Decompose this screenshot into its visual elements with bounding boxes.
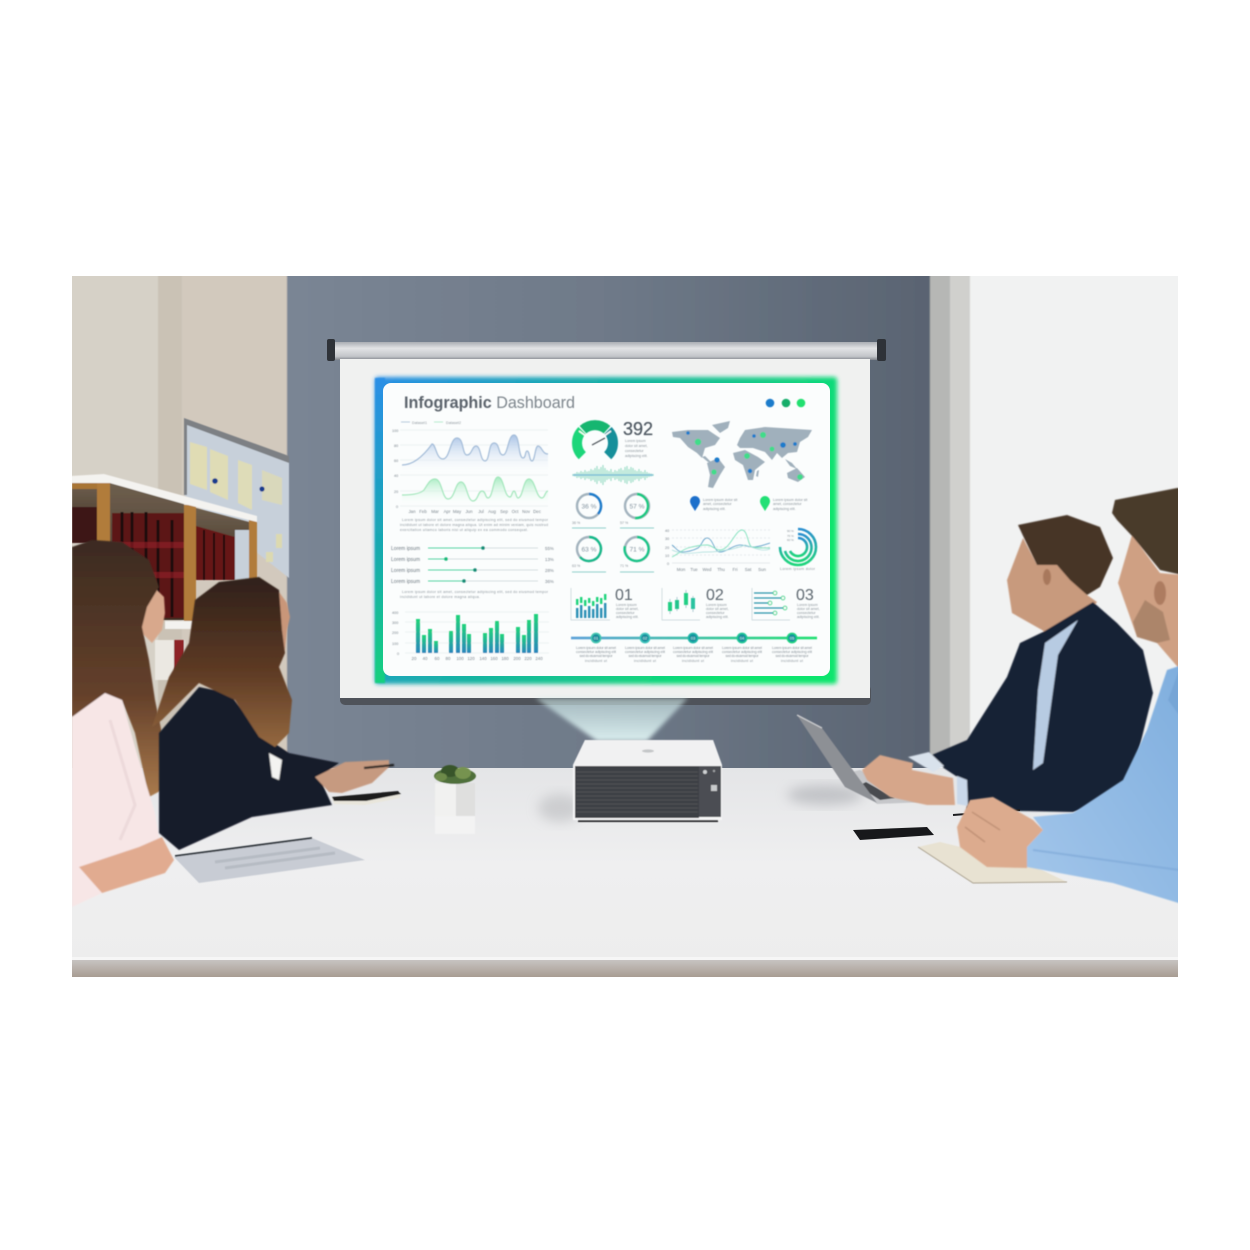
map legend blue: amet, consectetur <box>703 502 732 506</box>
timeline: incididunt ut <box>634 659 656 663</box>
papers on table <box>174 838 365 883</box>
title: Infographic Dashboard <box>404 393 575 412</box>
man with blue shirt <box>957 488 1182 904</box>
woman with pale blouse <box>72 540 174 907</box>
timeline: Lorem ipsum dolor sit amet <box>722 646 762 650</box>
sliders: Lorem ipsum <box>391 546 420 552</box>
bar chart: 0 <box>397 652 399 656</box>
map legend green: amet, consectetur <box>773 502 802 506</box>
sliders: 13% <box>545 557 554 562</box>
card 03: consectetur <box>797 611 816 615</box>
gauge value: Lorem ipsum <box>625 439 646 443</box>
laptop <box>797 715 925 804</box>
card 03: dolor sit amet, <box>797 607 820 611</box>
bar chart: 240 <box>535 656 543 661</box>
chart description: Lorem ipsum dolor sit amet, consectetur adipiscing elit, sed do eiusmod tempor <box>402 518 549 522</box>
card 02: adipiscing elit. <box>706 615 729 619</box>
donut 71%: 71 % <box>620 564 629 568</box>
card 02: Lorem ipsum <box>706 603 727 607</box>
area chart: Dataset2 <box>446 421 461 425</box>
map legend blue: adipiscing elit. <box>703 507 726 511</box>
whiteboard with sticky notes <box>184 418 289 578</box>
card 03: Lorem ipsum <box>797 603 818 607</box>
timeline: sed do eiusmod tempor <box>776 654 809 658</box>
timeline: 04 <box>740 636 745 640</box>
line chart: 20 <box>665 546 669 550</box>
chart description: incididunt ut labore et dolore magna aliqua. Ut enim ad minim veniam, quis nostrud <box>400 523 548 527</box>
timeline: 01 <box>594 636 599 640</box>
sliders <box>391 546 554 585</box>
bar chart: 200 <box>392 631 398 635</box>
card 01: adipiscing elit. <box>616 615 639 619</box>
timeline: incididunt ut <box>781 659 803 663</box>
donut 36%: 36 % <box>581 504 597 510</box>
line chart: 0 <box>667 562 669 566</box>
gauge value: adipiscing elit. <box>625 454 648 458</box>
area chart: Jan <box>408 509 416 514</box>
photo: meeting room scene <box>70 274 1182 977</box>
timeline: 05 <box>790 636 795 640</box>
plant in white pot <box>434 765 476 834</box>
timeline: Lorem ipsum dolor sit amet <box>576 646 616 650</box>
line chart: Wed <box>703 567 712 572</box>
card 01: dolor sit amet, <box>616 607 639 611</box>
timeline: sed do eiusmod tempor <box>676 654 710 658</box>
screen roller case <box>327 339 886 361</box>
chart description: exercitation ullamco laboris nisi ut aliquip ex ea commodo consequat. <box>400 528 528 532</box>
card 02: 02 <box>706 587 724 604</box>
area chart <box>392 421 548 514</box>
timeline: Lorem ipsum dolor sit amet <box>625 646 665 650</box>
right notebook <box>918 842 1067 883</box>
card 03: 03 <box>796 587 814 604</box>
card 01: 01 <box>615 587 633 604</box>
bar chart: 400 <box>392 611 398 615</box>
gauge value <box>623 419 653 458</box>
donut 63% <box>572 537 606 572</box>
bar chart: 100 <box>456 656 464 661</box>
man with navy jacket <box>862 515 1153 812</box>
sliders: 28% <box>545 568 554 573</box>
map legend green: adipiscing elit. <box>773 507 796 511</box>
sliders: Lorem ipsum <box>391 579 420 585</box>
line chart: 40 <box>665 529 669 533</box>
line chart <box>665 529 770 572</box>
sliders: Lorem ipsum <box>391 568 420 574</box>
slider description <box>400 590 549 599</box>
timeline: sed do eiusmod tempor <box>580 654 613 658</box>
area chart: 100 <box>392 429 398 433</box>
area chart: 0 <box>396 505 398 509</box>
bar chart: 40 <box>423 656 428 661</box>
bar chart: 180 <box>501 656 509 661</box>
dashboard projected image <box>375 377 837 684</box>
line chart: 30 <box>665 537 669 541</box>
line chart: Sat <box>745 567 752 572</box>
donut 36% <box>572 494 606 528</box>
bookshelf with red books <box>70 474 257 680</box>
concentric ring chart: 60 % <box>787 538 794 542</box>
area chart: Nov <box>522 509 531 514</box>
concentric ring chart: 75 % <box>787 534 794 538</box>
line chart: Sun <box>758 567 766 572</box>
line chart: Mon <box>677 567 686 572</box>
gauge value: 392 <box>623 419 653 439</box>
slider description: Lorem ipsum dolor sit amet, consectetur adipiscing elit, sed do eiusmod tempor <box>402 590 549 594</box>
room background walls <box>72 276 1178 768</box>
slider description: incididunt ut labore et dolore magna aliqua. <box>400 595 480 599</box>
chart description <box>400 518 549 532</box>
line chart: Thu <box>717 567 725 572</box>
sliders: Lorem ipsum <box>391 557 420 563</box>
donut 57%: 57 % <box>629 504 645 510</box>
donut 57%: 57 % <box>620 521 629 525</box>
area chart: Dataset1 <box>412 421 427 425</box>
bar chart: 300 <box>392 621 398 625</box>
screen surface <box>340 359 871 705</box>
card 03 <box>752 587 820 620</box>
card 01: consectetur <box>616 611 635 615</box>
bar chart: 160 <box>490 656 498 661</box>
card 02 <box>662 587 729 620</box>
bar chart: 120 <box>467 656 475 661</box>
map legend green: Lorem ipsum dolor sit <box>773 498 807 502</box>
timeline: sed do eiusmod tempor <box>726 654 759 658</box>
card 02: consectetur <box>706 611 725 615</box>
area chart: 60 <box>394 459 398 463</box>
dashboard coloured glow frame <box>375 377 837 684</box>
area chart: Jul <box>478 509 484 514</box>
timeline: consectetur adipiscing elit <box>576 650 616 654</box>
gauge value: dolor sit amet, <box>625 444 648 448</box>
donut 63%: 63 % <box>581 546 597 554</box>
card 03: adipiscing elit. <box>797 615 820 619</box>
line chart: 10 <box>665 554 669 558</box>
timeline: sed do eiusmod tempor <box>628 654 662 658</box>
donut 36%: 36 % <box>572 521 581 525</box>
donut 57% <box>620 494 654 528</box>
card 01 <box>571 587 639 620</box>
concentric ring chart <box>780 529 816 571</box>
woman with dark jacket <box>152 577 394 850</box>
donut 63%: 63 % <box>572 564 581 568</box>
timeline: 02 <box>643 636 648 640</box>
conference table <box>72 768 1178 977</box>
area chart: 80 <box>394 444 398 448</box>
bar chart: 60 <box>435 656 440 661</box>
bar chart: 100 <box>392 642 398 646</box>
card 01: Lorem ipsum <box>616 603 637 607</box>
donut 71% <box>620 537 654 572</box>
area chart: Sep <box>500 509 508 514</box>
bar chart: 200 <box>513 656 521 661</box>
gauge <box>577 425 613 456</box>
projector light beam <box>535 698 688 741</box>
bar chart: 20 <box>412 656 417 661</box>
area chart: Aug <box>488 509 496 514</box>
line chart: Tue <box>690 567 698 572</box>
area chart: 20 <box>394 490 398 494</box>
notebook on table <box>332 791 401 805</box>
area chart: Mar <box>431 509 439 514</box>
area chart: Jun <box>465 509 473 514</box>
timeline: incididunt ut <box>731 659 753 663</box>
timeline: Lorem ipsum dolor sit amet <box>772 646 812 650</box>
timeline: consectetur adipiscing elit <box>722 650 762 654</box>
projection screen <box>327 339 886 705</box>
donut 71%: 71 % <box>629 546 645 554</box>
sliders: 36% <box>545 579 554 584</box>
timeline: consectetur adipiscing elit <box>772 650 812 654</box>
status dots <box>766 399 805 407</box>
timeline <box>571 633 817 663</box>
timeline: consectetur adipiscing elit <box>673 650 713 654</box>
area chart: May <box>453 509 462 514</box>
bar chart: 220 <box>524 656 532 661</box>
concentric ring chart: Lorem ipsum dolor <box>780 567 816 571</box>
gauge value: consectetur <box>625 449 644 453</box>
timeline: incididunt ut <box>585 659 607 663</box>
world map <box>672 421 812 488</box>
area chart: Feb <box>419 509 427 514</box>
bar chart: 80 <box>446 656 451 661</box>
phone on table <box>853 827 934 840</box>
map legend blue <box>690 496 737 511</box>
concentric ring chart: 90 % <box>787 529 794 533</box>
pen on table <box>953 810 1020 815</box>
sliders: 55% <box>545 546 554 551</box>
timeline: Lorem ipsum dolor sit amet <box>673 646 713 650</box>
timeline: consectetur adipiscing elit <box>625 650 665 654</box>
area chart: Oct <box>512 509 519 514</box>
projector <box>573 740 722 822</box>
timeline: 03 <box>691 636 696 640</box>
area chart: Apr <box>444 509 451 514</box>
waveform <box>573 465 653 485</box>
area chart: 40 <box>394 474 398 478</box>
line chart: Fri <box>732 567 738 572</box>
bar chart <box>392 611 549 661</box>
card 02: dolor sit amet, <box>706 607 729 611</box>
map legend green <box>760 496 807 511</box>
map legend blue: Lorem ipsum dolor sit <box>703 498 737 502</box>
bar chart: 140 <box>479 656 487 661</box>
area chart: Dec <box>533 509 542 514</box>
timeline: incididunt ut <box>682 659 704 663</box>
